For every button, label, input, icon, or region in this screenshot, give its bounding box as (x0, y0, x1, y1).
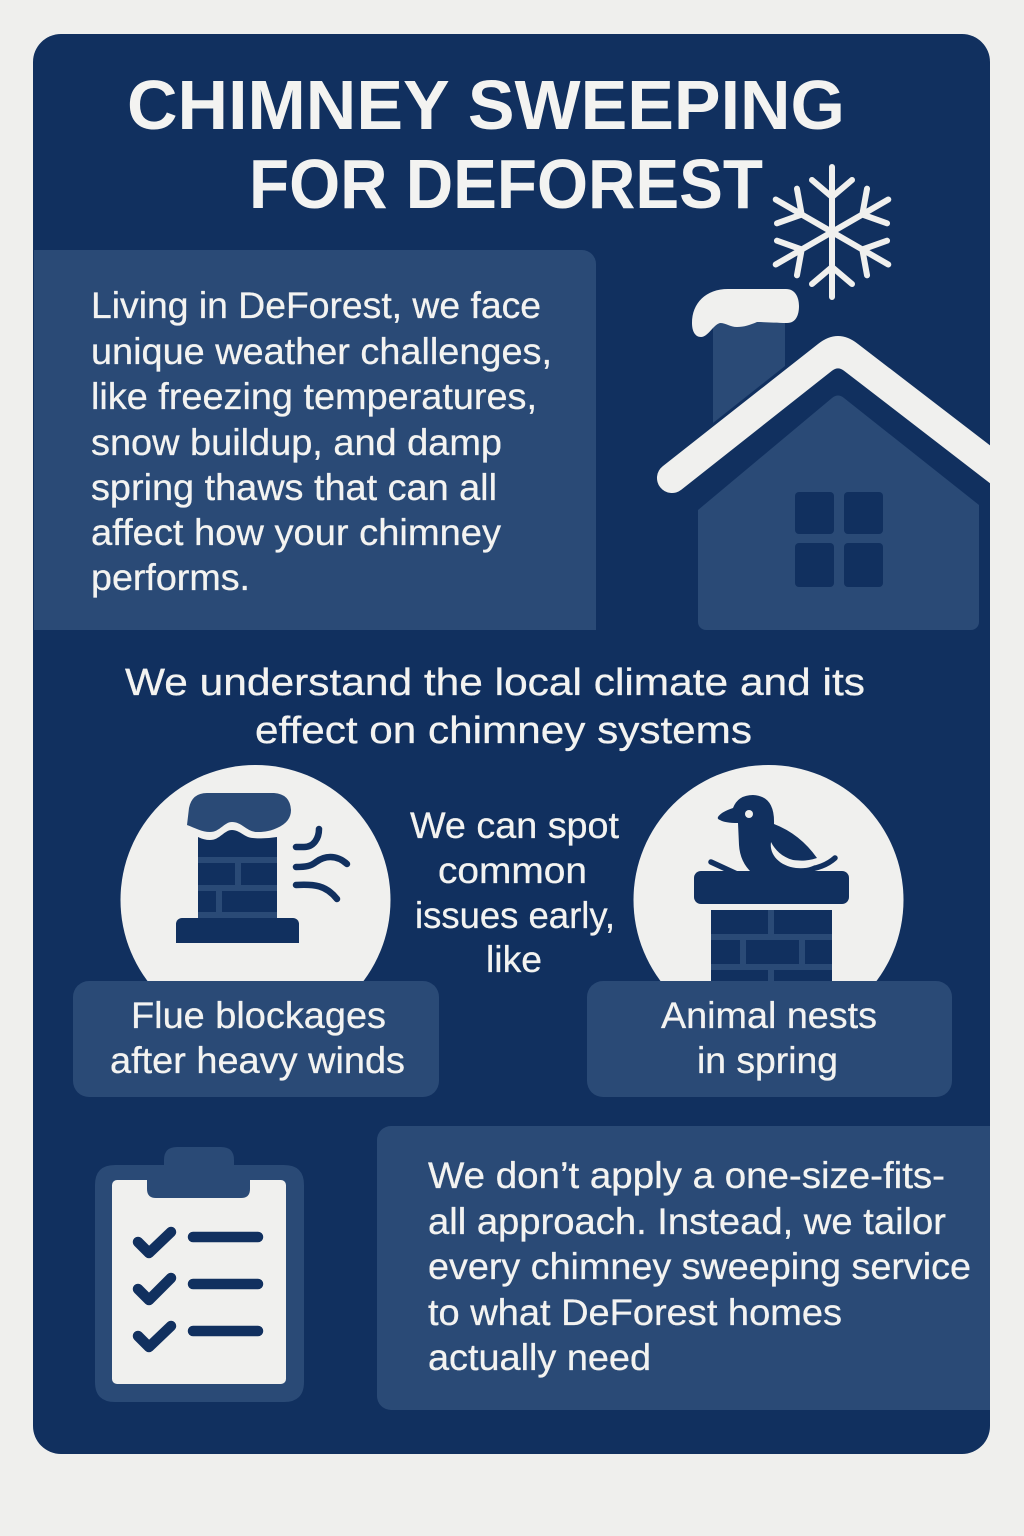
text: we can spot: common (438, 850, 587, 891)
title: CHIMNEY SWEEPING (127, 66, 845, 144)
intro text: Living in DeForest, we face (91, 285, 541, 326)
chimney cap (694, 871, 849, 904)
intro text: performs. (91, 557, 250, 598)
title (127, 66, 845, 223)
chimney bricks (198, 860, 277, 915)
panel: tailored service (377, 1126, 990, 1410)
subheading: We understand the local climate and its (125, 662, 865, 704)
label: animal nests: Animal nests (661, 995, 877, 1036)
house body (698, 396, 979, 630)
intro text: snow buildup, and damp (91, 422, 502, 463)
checklist row 3 (138, 1326, 258, 1347)
icon: clipboard checklist (95, 1147, 304, 1402)
text: we can spot (410, 805, 620, 980)
chimney body (198, 830, 277, 918)
clip (147, 1180, 250, 1198)
intro text (91, 285, 552, 598)
bird (718, 795, 817, 873)
checklist row 2 (138, 1278, 258, 1300)
subheading: effect on chimney systems (255, 710, 752, 752)
icon: chimney in wind circle (120, 765, 390, 981)
label: flue blockages: Flue blockages (131, 995, 386, 1036)
text: we can spot: issues early, (415, 895, 615, 936)
snowy roof (657, 336, 1000, 493)
icon: snowy house with chimney (657, 289, 1000, 630)
panel: DeForest weather intro (34, 250, 596, 630)
bird wing (771, 842, 819, 868)
text: we can spot: like (486, 939, 542, 980)
intro text: like freezing temperatures, (91, 376, 537, 417)
tailored service text: actually need (428, 1337, 651, 1378)
paper (112, 1180, 286, 1384)
tailored service text: We don’t apply a one-size-fits- (428, 1155, 945, 1196)
text: we can spot: We can spot (410, 805, 620, 846)
label: animal nests (587, 981, 952, 1097)
snow cap (187, 793, 291, 832)
label: flue blockages: after heavy winds (110, 1040, 405, 1081)
tailored service text: to what DeForest homes (428, 1292, 842, 1333)
clipboard board (95, 1147, 304, 1402)
intro text: affect how your chimney (91, 512, 502, 553)
title: FOR DEFOREST (249, 145, 763, 223)
tailored service text: all approach. Instead, we tailor (428, 1201, 946, 1242)
subheading (125, 662, 865, 752)
label: animal nests: in spring (697, 1040, 838, 1081)
bird eye (745, 810, 753, 818)
chimney bricks (711, 910, 832, 985)
window (795, 492, 883, 587)
nest twigs (711, 858, 835, 874)
wind lines (296, 829, 347, 899)
chimney stack (713, 320, 785, 423)
icon: snowflake (766, 167, 898, 297)
checklist row 1 (138, 1232, 258, 1253)
chimney base (176, 918, 299, 943)
tailored service text (428, 1155, 971, 1378)
snow on chimney (692, 289, 799, 337)
label: flue blockages (73, 981, 439, 1097)
tailored service text: every chimney sweeping service (428, 1246, 971, 1287)
chimney stack (711, 910, 832, 985)
icon: bird on chimney circle (634, 765, 904, 981)
intro text: spring thaws that can all (91, 467, 497, 508)
intro text: unique weather challenges, (91, 331, 552, 372)
